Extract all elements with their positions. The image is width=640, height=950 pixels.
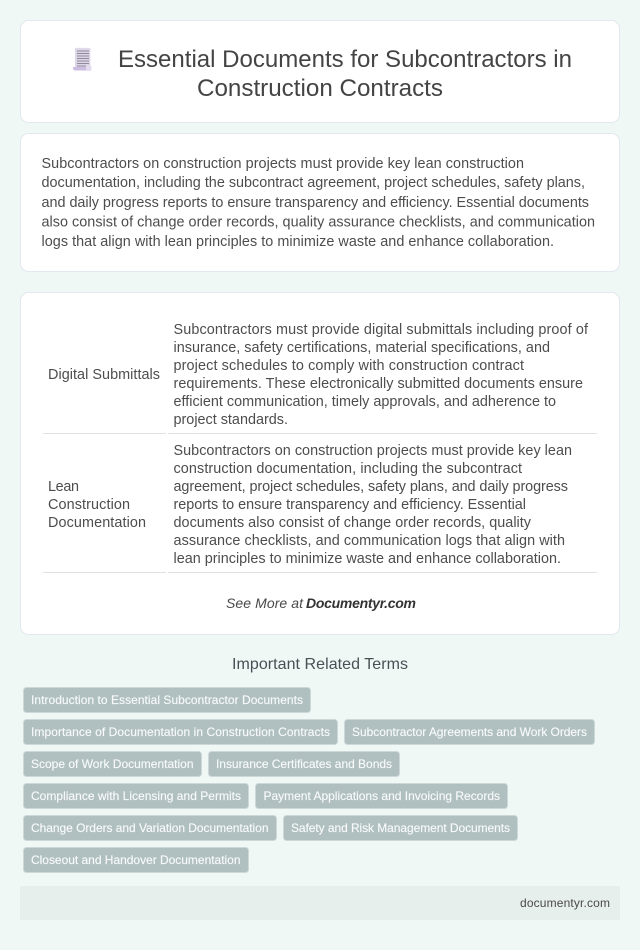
tag: Importance of Documentation in Construction Contracts xyxy=(31,725,330,739)
row text: lean construction documentation: lean principles to minimize waste and enhance collaboration. xyxy=(174,551,561,567)
icon: document scroll xyxy=(73,48,92,71)
tag: Introduction to Essential Subcontractor Documents xyxy=(31,693,303,707)
tag xyxy=(208,752,400,776)
row text: digital submittals: insurance, safety certifications, material specifications, and xyxy=(174,340,550,356)
row label: lean construction documentation xyxy=(48,479,146,531)
title xyxy=(118,46,572,102)
row text: digital submittals xyxy=(174,322,589,428)
tag: Payment Applications and Invoicing Records xyxy=(264,789,500,803)
row label: lean construction documentation: Documentation xyxy=(48,515,146,531)
table row: lean construction documentation xyxy=(48,443,572,567)
row text: digital submittals: project standards. xyxy=(174,412,288,428)
row text: lean construction documentation: documents also consist of change order records, quality xyxy=(174,515,532,531)
row text: lean construction documentation: agreement, project schedules, safety plans, and daily progress xyxy=(174,479,568,495)
tag: Subcontractor Agreements and Work Orders xyxy=(352,725,587,739)
row text: digital submittals: requirements. These electronically submitted documents ensure xyxy=(174,376,583,392)
panel: header xyxy=(20,20,620,122)
text block: introduction xyxy=(42,156,595,250)
row text: lean construction documentation: reports to ensure transparency and efficiency. Essential xyxy=(174,497,526,513)
tag: Change Orders and Variation Documentation xyxy=(31,821,268,835)
text block: introduction: logs that align with lean principles to minimize waste and enhance collaboration. xyxy=(42,234,554,250)
link: see more: See More at xyxy=(226,595,304,611)
row text: digital submittals: Subcontractors must provide digital submittals including proof of xyxy=(174,322,589,338)
tag xyxy=(284,816,518,840)
tag xyxy=(24,848,248,872)
tag xyxy=(256,784,508,808)
title: Essential Documents for Subcontractors in xyxy=(118,46,572,73)
tag xyxy=(24,784,248,808)
table row: digital submittals xyxy=(48,322,589,428)
tag: Compliance with Licensing and Permits xyxy=(31,789,241,803)
title: Construction Contracts xyxy=(197,75,443,102)
footer xyxy=(20,886,620,920)
tag: Safety and Risk Management Documents xyxy=(291,821,510,835)
row text: digital submittals: project schedules to comply with construction contract xyxy=(174,358,524,374)
panel: documents table xyxy=(20,292,620,634)
text block: introduction: and daily progress reports to ensure transparency and efficiency. Essential documents xyxy=(42,195,589,211)
panel: introduction xyxy=(20,134,620,272)
tag: Closeout and Handover Documentation xyxy=(31,853,240,867)
link: see more: Documentyr.com xyxy=(306,595,416,611)
row label: lean construction documentation: Lean xyxy=(48,479,79,495)
row text: lean construction documentation xyxy=(174,443,572,567)
tag: Scope of Work Documentation xyxy=(31,757,194,771)
row text: lean construction documentation: assurance checklists, and communication logs that align with xyxy=(174,533,565,549)
tag xyxy=(24,720,338,744)
row label: lean construction documentation: Construction xyxy=(48,497,130,513)
link: see more xyxy=(226,595,416,611)
text block: introduction: also consist of change order records, quality assurance checklists, and communication xyxy=(42,214,595,230)
text block: introduction: Subcontractors on construction projects must provide key lean construction xyxy=(42,156,524,172)
footer: documentyr.com xyxy=(520,896,610,910)
tag xyxy=(344,720,594,744)
row label: digital submittals: Digital Submittals xyxy=(48,367,160,383)
tag xyxy=(24,816,276,840)
heading: important related terms: Important Related Terms xyxy=(232,656,408,673)
row text: digital submittals: efficient communication, timely approvals, and adherence to xyxy=(174,394,556,410)
tag: Insurance Certificates and Bonds xyxy=(216,757,392,771)
row text: lean construction documentation: construction documentation, including the subcontract xyxy=(174,461,522,477)
row text: lean construction documentation: Subcontractors on construction projects must provide key lean xyxy=(174,443,572,459)
tag xyxy=(24,688,310,712)
tag xyxy=(24,752,202,776)
text block: introduction: documentation, including the subcontract agreement, project schedules, safety plans, xyxy=(42,175,585,191)
panel: related term tags xyxy=(24,688,594,872)
